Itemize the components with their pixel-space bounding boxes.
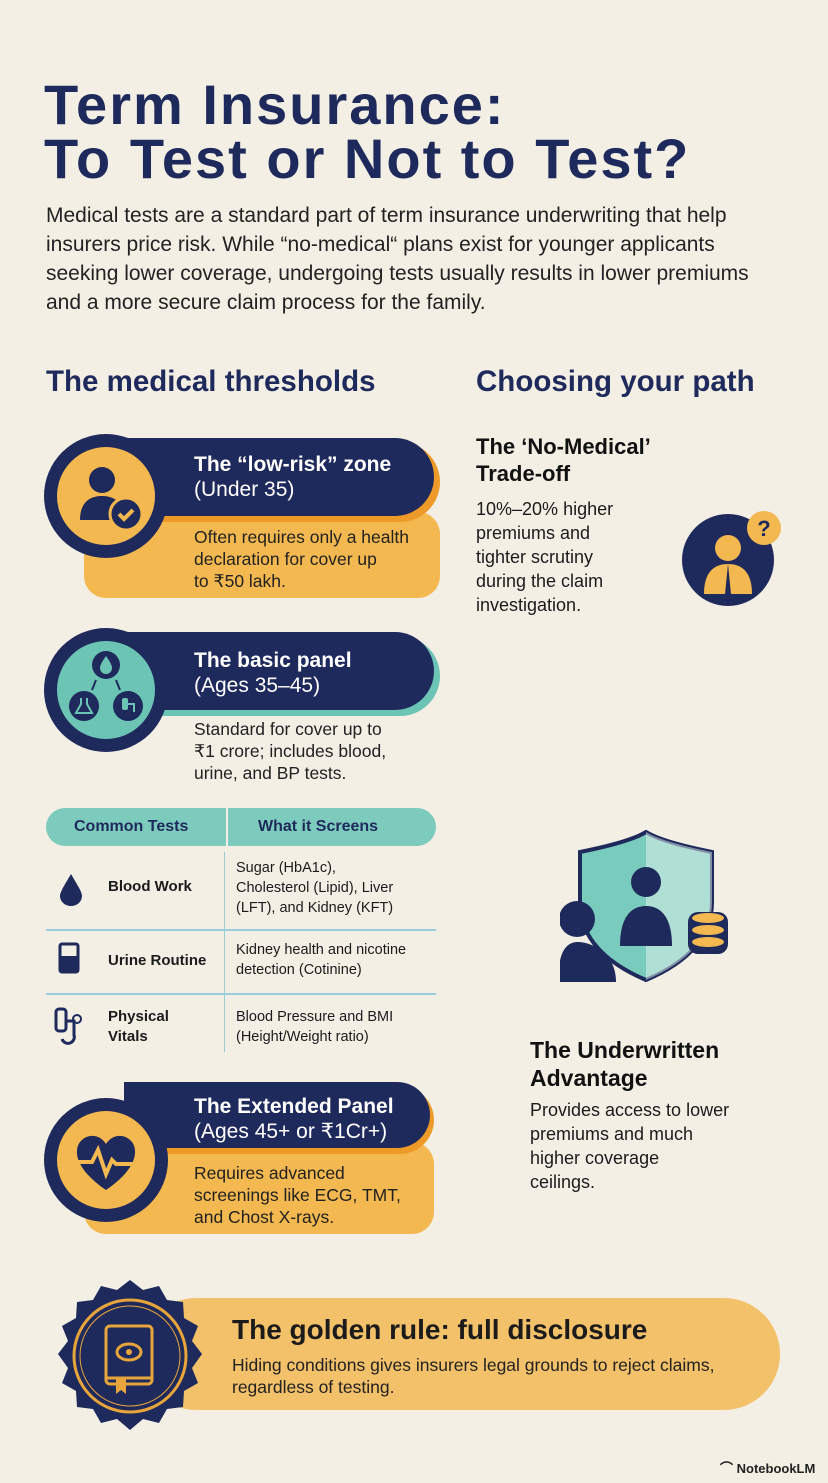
card: basic panel [44, 628, 440, 783]
right: underwritten advantage: Advantage [530, 1065, 648, 1091]
callout: golden rule: Hiding conditions gives insurers legal grounds to reject claims, [232, 1355, 714, 1375]
icon: test trio [44, 628, 165, 752]
icon: heart pulse [44, 1098, 168, 1222]
card: low-risk zone: Often requires only a health [194, 527, 409, 547]
title [44, 73, 690, 190]
right: no-medical trade-off: Trade-off [476, 461, 570, 486]
right: no-medical trade-off [476, 434, 651, 615]
right: no-medical trade-off: during the claim [476, 571, 603, 591]
table: common tests [46, 808, 436, 1052]
row: vitals: Vitals [108, 1028, 148, 1045]
row: vitals: Blood Pressure and BMI [236, 1009, 393, 1025]
right: no-medical trade-off: investigation. [476, 595, 581, 615]
card: extended panel: The Extended Panel [194, 1095, 394, 1118]
right: no-medical trade-off: 10%–20% higher [476, 499, 613, 519]
icon: shield people coins [560, 830, 728, 982]
row: urine: detection (Cotinine) [236, 962, 362, 978]
icon: person question [682, 511, 781, 606]
callout: golden rule: regardless of testing. [232, 1377, 394, 1397]
row: urine [58, 942, 406, 978]
card: basic panel: ₹1 crore; includes blood, [194, 741, 386, 761]
callout: golden rule [58, 1280, 780, 1430]
card: basic panel: The basic panel [194, 649, 352, 672]
card: extended panel: screenings like ECG, TMT, [194, 1185, 401, 1205]
card: low-risk zone: declaration for cover up [194, 549, 377, 569]
card text [194, 453, 391, 501]
card: extended panel: (Ages 45+ or ₹1Cr+) [194, 1120, 387, 1143]
row: blood work: Cholesterol (Lipid), Liver [236, 880, 393, 896]
card: extended panel: and Chost X-rays. [194, 1207, 334, 1227]
footer: notebooklm: ⌒ NotebookLM [720, 1461, 815, 1476]
card: basic panel: Standard for cover up to [194, 719, 382, 739]
right: no-medical trade-off: tighter scrutiny [476, 547, 593, 567]
callout: golden rule: The golden rule: full disclosure [232, 1314, 647, 1345]
right: no-medical trade-off: The ‘No-Medical’ [476, 434, 651, 459]
heading: medical thresholds: The medical thresholds [46, 365, 376, 398]
card: basic panel: (Ages 35–45) [194, 674, 320, 697]
right: underwritten advantage [530, 1037, 729, 1192]
title: To Test or Not to Test? [44, 127, 690, 190]
row: vitals [54, 1008, 393, 1045]
row: urine: Kidney health and nicotine [236, 942, 406, 958]
row: blood work: Sugar (HbA1c), [236, 860, 336, 876]
icon: badge book [58, 1280, 202, 1430]
row: vitals: Physical [108, 1008, 169, 1025]
row: urine: Urine Routine [108, 952, 206, 969]
icon: person question: ? [757, 516, 771, 541]
intro text: Medical tests are a standard part of term insurance underwriting that help insurers price risk. While “no-medical“ plans exist for younger applicants seeking lower coverage, undergoing tests usually results in lower premiums and a more secure claim process for the family. [46, 204, 749, 314]
title: Term Insurance: [44, 73, 506, 136]
card text: The “low-risk” zone [194, 453, 391, 476]
card: extended panel: Requires advanced [194, 1163, 345, 1183]
row: blood work: (LFT), and Kidney (KFT) [236, 900, 393, 916]
row: blood work [60, 860, 393, 916]
table: common tests: What it Screens [258, 818, 378, 835]
card: low-risk zone [44, 434, 440, 598]
row: blood work: Blood Work [108, 878, 192, 895]
heading: choosing your path: Choosing your path [476, 365, 755, 398]
card text: (Under 35) [194, 478, 294, 501]
table: common tests: Common Tests [74, 818, 188, 835]
right: underwritten advantage: ceilings. [530, 1172, 595, 1192]
right: underwritten advantage: higher coverage [530, 1148, 659, 1168]
right: no-medical trade-off: premiums and [476, 523, 590, 543]
card: extended panel [44, 1082, 434, 1234]
card: low-risk zone: to ₹50 lakh. [194, 571, 286, 591]
card: basic panel: urine, and BP tests. [194, 763, 346, 783]
row: vitals: (Height/Weight ratio) [236, 1029, 369, 1045]
right: underwritten advantage: The Underwritten [530, 1037, 719, 1063]
icon: person check [44, 434, 165, 558]
right: underwritten advantage: Provides access to lower [530, 1100, 729, 1120]
right: underwritten advantage: premiums and much [530, 1124, 693, 1144]
